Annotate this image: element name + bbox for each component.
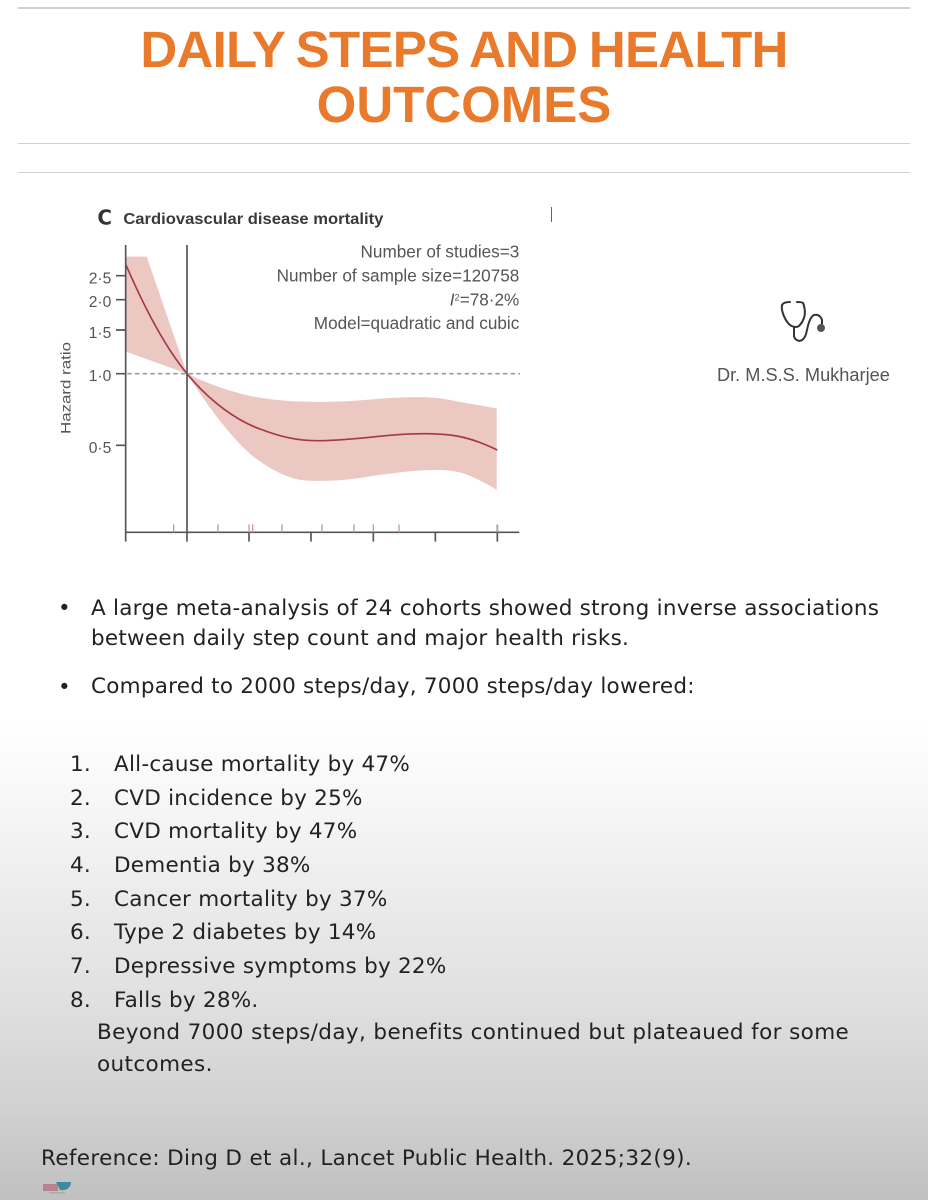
study statistics: I: [450, 290, 455, 310]
numbered list of outcomes: Falls by 28%.: [114, 988, 258, 1013]
hazard ratio curve: [126, 265, 497, 450]
numbered list of outcomes: CVD incidence by 25%: [114, 786, 363, 811]
bullet: meta-analysis: A large meta-analysis of 24 cohorts showed strong inverse associations: [91, 596, 879, 621]
stray mark: [551, 207, 552, 222]
chart panel letter and heading: [97, 206, 384, 230]
chart: cardiovascular disease mortality hazard ratio: [58, 206, 520, 542]
confidence band: [126, 257, 497, 490]
title: DAILY STEPS AND HEALTH: [140, 21, 788, 78]
y-axis labels: 2·0: [89, 294, 112, 311]
y-axis labels: 1·0: [89, 368, 112, 385]
study statistics: =78·2%: [460, 290, 519, 310]
logo: [43, 1182, 71, 1194]
numbered list of outcomes: 4.: [70, 853, 91, 878]
icon: stethoscope: [780, 301, 825, 342]
numbered list of outcomes: Type 2 diabetes by 14%: [114, 920, 376, 945]
bullet: meta-analysis: between daily step count and major health risks.: [91, 626, 629, 651]
study statistics: Number of sample size=120758: [277, 266, 519, 286]
closing note: [97, 1020, 849, 1077]
axes: [116, 245, 519, 542]
numbered list of outcomes: 1.: [70, 752, 91, 777]
y-axis labels: [89, 271, 112, 457]
title: [140, 21, 788, 133]
bullet marker: •: [58, 596, 71, 621]
closing note: Beyond 7000 steps/day, benefits continued but plateaued for some: [97, 1020, 849, 1045]
numbered list of outcomes: Dementia by 38%: [114, 853, 311, 878]
y-axis labels: 1·5: [89, 325, 112, 342]
reference: Reference: Ding D et al., Lancet Public Health. 2025;32(9).: [41, 1146, 692, 1171]
y-axis labels: 0·5: [89, 440, 112, 457]
numbered list of outcomes: 7.: [70, 954, 91, 979]
title: OUTCOMES: [317, 76, 611, 133]
author name: Dr. M.S.S. Mukharjee: [717, 365, 890, 385]
numbered list of outcomes: 3.: [70, 819, 91, 844]
y-axis labels: 2·5: [89, 271, 112, 288]
bullet marker: •: [58, 675, 71, 700]
numbered list of outcomes: Depressive symptoms by 22%: [114, 954, 446, 979]
study statistics: 2: [455, 292, 460, 302]
study statistics: [277, 242, 520, 333]
y-axis title: Hazard ratio: [58, 342, 74, 434]
numbered list of outcomes: Cancer mortality by 37%: [114, 887, 388, 912]
study statistics: Model=quadratic and cubic: [314, 313, 520, 333]
bullet: meta-analysis: [91, 596, 879, 651]
numbered list of outcomes: 5.: [70, 887, 91, 912]
chart panel letter and heading: Cardiovascular disease mortality: [123, 211, 384, 228]
numbered list of outcomes: All-cause mortality by 47%: [114, 752, 410, 777]
study statistics: Number of studies=3: [361, 242, 519, 262]
numbered list of outcomes: [70, 752, 446, 1013]
numbered list of outcomes: 6.: [70, 920, 91, 945]
numbered list of outcomes: 8.: [70, 988, 91, 1013]
bullet: comparison: Compared to 2000 steps/day, 7000 steps/day lowered:: [91, 674, 695, 699]
rug marks: [174, 524, 497, 532]
chart panel letter and heading: C: [97, 206, 112, 230]
numbered list of outcomes: CVD mortality by 47%: [114, 819, 357, 844]
reference line at hazard ratio 1.0: [127, 371, 520, 376]
numbered list of outcomes: 2.: [70, 786, 91, 811]
closing note: outcomes.: [97, 1052, 213, 1077]
